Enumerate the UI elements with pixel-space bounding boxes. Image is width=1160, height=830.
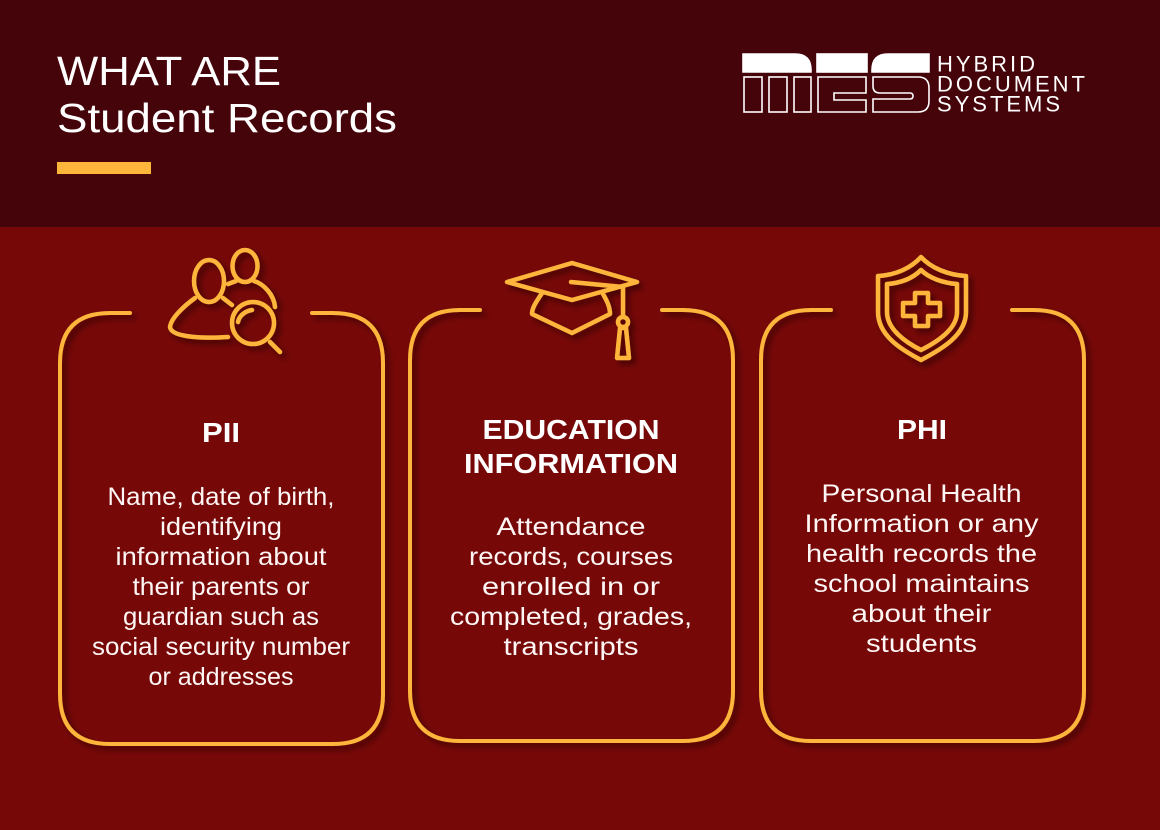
text: PHI description: Information or any [804,510,1039,538]
text: PHI description [804,480,1039,658]
logo [743,52,1085,116]
logo wordmark: HYBRID [937,52,1035,76]
text: PHI description: school maintains [814,570,1030,598]
title [57,48,397,141]
text: Education description: enrolled in or [482,573,660,601]
heading: PHI: PHI [897,414,947,445]
header band [0,0,1160,227]
panel: PHI [761,257,1084,741]
heading: Education Information: EDUCATION [482,414,660,445]
text: PII description [92,483,350,691]
text: Education description: completed, grades, [450,603,692,631]
title: WHAT ARE [57,48,281,94]
panel outline: PHI [761,310,1084,741]
text: Education description: Attendance [496,513,646,541]
text: PII description: or addresses [148,663,294,691]
text: PII description: information about [116,543,327,571]
panel: PII [60,250,383,744]
text: PHI description: Personal Health [822,480,1022,508]
text: Education description: transcripts [504,633,638,661]
text: Education description [450,513,692,661]
panel outline: Education Information [410,310,733,741]
heading: Education Information [464,414,678,479]
text: PII description: their parents or [132,573,310,601]
icon: graduation cap [507,263,637,358]
panel: Education Information [410,263,733,741]
heading: PII: PII [202,417,240,448]
title accent bar [57,162,151,174]
text: Education description: records, courses [469,543,673,571]
text: PHI description: about their [852,600,992,628]
title: Student Records [57,95,397,141]
logo wordmark [937,52,1085,116]
text: PII description: guardian such as [123,603,319,631]
text: PHI description: health records the [806,540,1037,568]
icon: medical shield [878,257,966,360]
logo wordmark: SYSTEMS [937,92,1060,116]
logo mark [743,54,929,112]
panel outline: PII [60,313,383,744]
text: PII description: Name, date of birth, [108,483,334,511]
icon: people with magnifying glass [170,250,280,352]
heading: Education Information: INFORMATION [464,448,678,479]
text: PII description: identifying [160,513,282,541]
text: PII description: social security number [92,633,350,661]
text: PHI description: students [866,630,977,658]
logo wordmark: DOCUMENT [937,72,1085,96]
